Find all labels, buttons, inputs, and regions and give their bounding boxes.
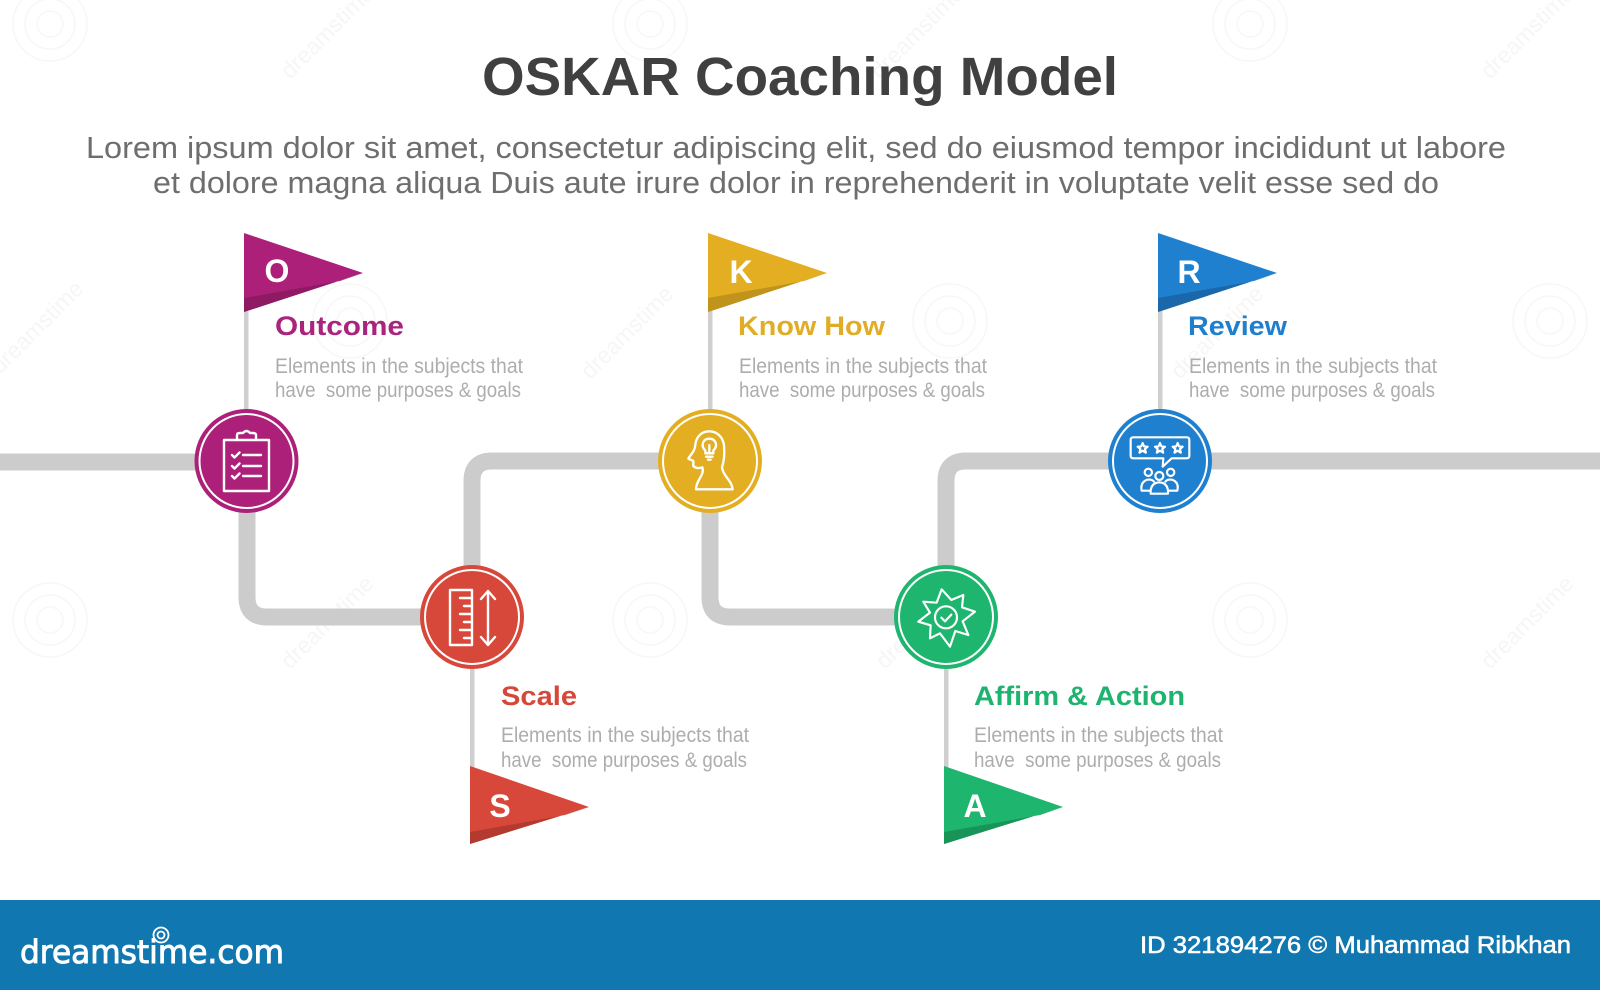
heading: Scale: Scale — [501, 681, 577, 711]
description R: have some purposes & goals — [1189, 379, 1435, 402]
footer band — [0, 900, 1600, 990]
circle icon: rating bubble and people — [1108, 409, 1212, 513]
flag pole O — [244, 305, 248, 415]
description O — [275, 355, 523, 402]
description R: Elements in the subjects that — [1189, 355, 1437, 378]
step K: Know How — [658, 233, 987, 513]
circle icon: badge with check — [894, 565, 998, 669]
flag pole A — [944, 665, 948, 770]
step A: Affirm & Action — [894, 565, 1223, 844]
flag pole K — [708, 305, 712, 415]
description O: Elements in the subjects that — [275, 355, 523, 378]
text: dreamstime — [275, 570, 378, 674]
description K — [739, 355, 987, 402]
description K: have some purposes & goals — [739, 379, 985, 402]
subtitle text block — [86, 130, 1506, 200]
flag S: S — [489, 788, 511, 824]
flag pole S — [470, 665, 474, 770]
heading: Know How: Know How — [738, 311, 886, 341]
flag S — [470, 766, 589, 844]
flag R: R — [1177, 254, 1201, 290]
text: dreamstime — [870, 570, 973, 674]
circle icon: head with light bulb — [658, 409, 762, 513]
circle icon: ruler and arrow — [420, 565, 524, 669]
text: dreamstime — [575, 280, 678, 384]
step S: Scale — [420, 565, 749, 844]
flag A: A — [963, 788, 987, 824]
heading: Review: Review — [1188, 311, 1288, 341]
description S: Elements in the subjects that — [501, 724, 749, 747]
flag K: K — [729, 254, 753, 290]
footer logo: dreamstime.com — [20, 933, 284, 971]
flag A — [944, 766, 1063, 844]
step R: Review — [1108, 233, 1437, 513]
subtitle text block: Lorem ipsum dolor sit amet, consectetur adipiscing elit, sed do eiusmod tempor incididunt ut labore — [86, 130, 1506, 165]
description K: Elements in the subjects that — [739, 355, 987, 378]
flag O: O — [265, 253, 289, 289]
flag O — [244, 233, 363, 312]
text: dreamstime — [1475, 570, 1578, 674]
winding road track — [0, 461, 1600, 617]
logo spiral icon — [154, 928, 168, 942]
heading: Outcome: Outcome — [275, 311, 404, 341]
circle icon: clipboard checklist — [194, 409, 298, 513]
description A — [974, 724, 1223, 772]
description A: have some purposes & goals — [974, 749, 1221, 772]
description A: Elements in the subjects that — [974, 724, 1223, 747]
footer credit: ID 321894276 © Muhammad Ribkhan — [1140, 932, 1571, 959]
flag K — [708, 233, 827, 312]
title: OSKAR Coaching Model — [482, 47, 1118, 107]
description O: have some purposes & goals — [275, 379, 521, 402]
description R — [1189, 355, 1437, 402]
text: dreamstime — [1165, 280, 1268, 384]
flag pole R — [1158, 305, 1162, 415]
description S: have some purposes & goals — [501, 749, 747, 772]
description S — [501, 724, 749, 772]
heading: Affirm & Action: Affirm & Action — [974, 681, 1185, 711]
subtitle text block: et dolore magna aliqua Duis aute irure dolor in reprehenderit in voluptate velit esse sed do — [153, 165, 1439, 200]
flag R — [1158, 233, 1277, 312]
step O: Outcome — [194, 233, 523, 513]
